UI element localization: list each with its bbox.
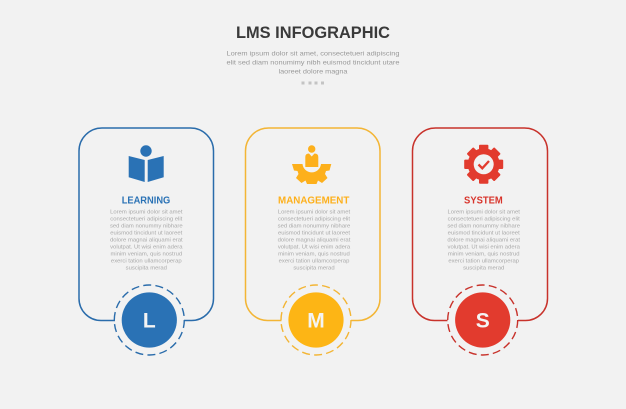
heading: learning: LEARNING [122, 196, 170, 207]
subtitle text: elit sed diam nonumimy nibh euismod tincidunt utare [226, 60, 400, 66]
text block: system: euismod tincidunt ut laoreet [448, 230, 520, 236]
text block: management [278, 209, 351, 272]
heading: system: SYSTEM [464, 196, 503, 207]
text block: management: Lorem ipsumi dolor sit amet [278, 209, 351, 215]
text block: system: minim veniam, quis nostrud [448, 252, 520, 258]
text block: system: consectetueri adipiscing elit [448, 216, 520, 222]
text block: management: suscipita merad [293, 266, 335, 272]
text block: management: euismod tincidunt ut laoreet [278, 230, 350, 236]
panel: management [246, 128, 380, 355]
title: LMS INFOGRAPHIC [236, 23, 390, 42]
badge: M [281, 285, 351, 355]
heading: management: MANAGEMENT [278, 196, 349, 207]
text block: learning: exerci tation ullamcorperap [111, 259, 182, 265]
text block: system: dolore magnai aliquami erat [447, 238, 520, 244]
text block: learning: minim veniam, quis nostrud [110, 252, 182, 258]
subtitle text: laoreet dolore magna [278, 68, 348, 76]
subtitle text [226, 50, 400, 76]
subtitle text: Lorem ipsum dolor sit amet, consectetueri adipiscing [226, 50, 400, 58]
text block: learning: volutpat. Ut wisi enim adera [110, 245, 183, 251]
text block: learning: euismod tincidunt ut laoreet [110, 230, 183, 236]
text block: system: Lorem ipsumi dolor sit amet [448, 209, 520, 215]
text block: learning: suscipita merad [126, 266, 167, 272]
text block: system: sed diam nonummy nibhare [447, 223, 521, 229]
text block: system [447, 209, 521, 272]
text block: management: volutpat. Ut wisi enim adera [278, 245, 351, 251]
panel: learning [79, 128, 214, 355]
text block: learning: sed diam nonummy nibhare [110, 223, 183, 229]
panel: system [412, 128, 548, 355]
text block: learning: consectetueri adipiscing elit [110, 216, 183, 222]
card outline [246, 128, 380, 320]
text block: management: sed diam nonummy nibhare [278, 223, 351, 229]
text block: management: consectetueri adipiscing elit [278, 216, 350, 222]
badge: L: L [143, 310, 156, 332]
card outline [79, 128, 214, 320]
text block: learning: Lorem ipsumi dolor sit amet [110, 209, 183, 215]
badge: S: S [476, 310, 490, 332]
icon: open book with reader [129, 145, 164, 182]
badge: S [448, 285, 518, 355]
badge: L [114, 285, 184, 355]
icon: gear with check mark [464, 145, 503, 184]
text block: system: suscipita merad [463, 266, 504, 272]
text block: system: exerci tation ullamcorperap [448, 259, 520, 265]
text block: learning: dolore magnai aliquami erat [110, 238, 183, 244]
page dots [302, 82, 324, 84]
text block: management: dolore magnai aliquami erat [278, 238, 351, 244]
badge: M: M [307, 310, 325, 332]
card outline [412, 128, 548, 320]
text block: system: volutpat. Ut wisi enim adera [448, 245, 521, 251]
text block: learning [110, 209, 183, 272]
icon: person on gear [292, 145, 331, 184]
text block: management: exerci tation ullamcorperap [279, 259, 350, 265]
text block: management: minim veniam, quis nostrud [278, 252, 350, 258]
